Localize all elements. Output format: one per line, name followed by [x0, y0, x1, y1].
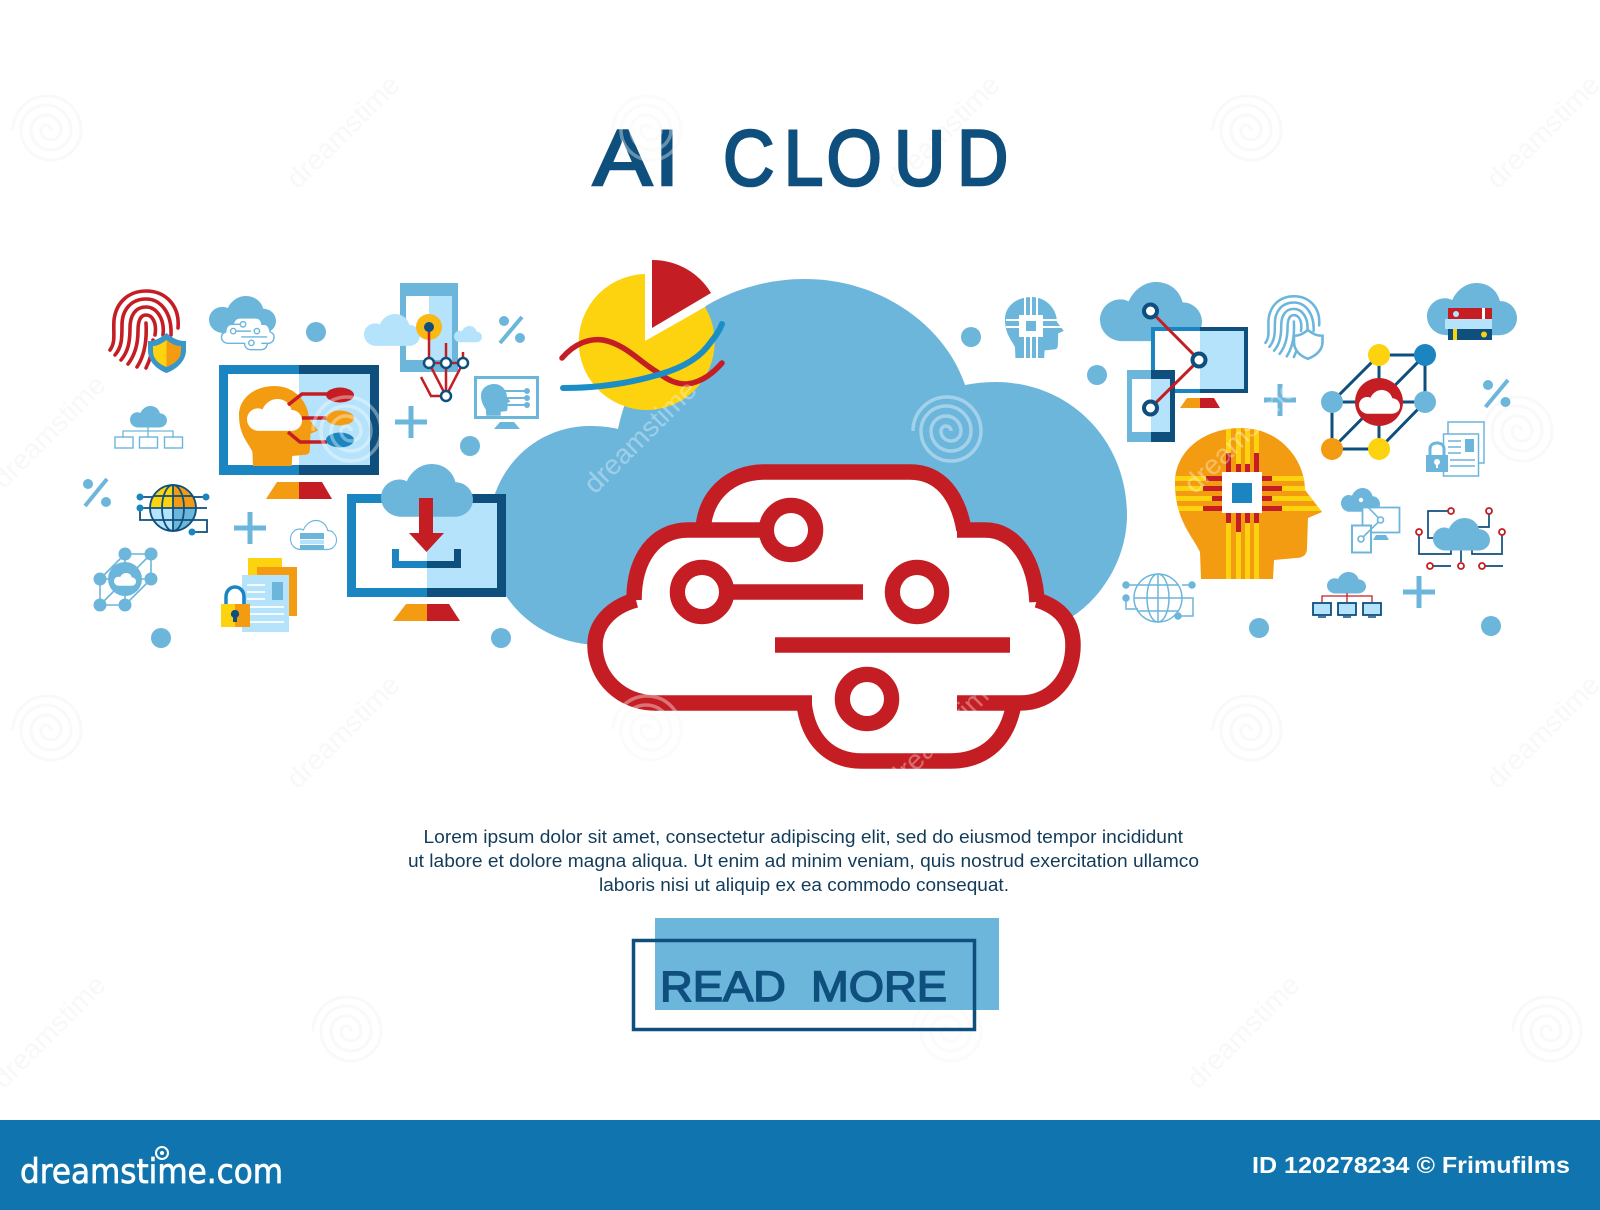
icon: cloud network with red links: [1313, 572, 1381, 617]
icon: outlined cloud with books: [290, 520, 336, 550]
description text block: laboris nisi ut aliquip ex ea commodo consequat.: [599, 874, 1009, 895]
chart: pie with curves: [562, 260, 722, 410]
icon: phone with clouds and network: [364, 283, 482, 401]
text: dreamstime: [577, 374, 703, 499]
icon: colored globe: [136, 485, 210, 536]
icon: outlined globe: [1123, 574, 1195, 622]
icon: cloud circuit: [1416, 508, 1505, 569]
description text block: [408, 826, 1199, 895]
icon: percent right: [1483, 380, 1510, 407]
icon: monitor with cloud download: [347, 464, 506, 621]
footer credit: ID 120278234 © Frimufilms: [1252, 1152, 1570, 1178]
description text block: ut labore et dolore magna aliqua. Ut enim ad minim veniam, quis nostrud exercitation ullamco: [408, 850, 1199, 871]
icon: small network cube: [94, 548, 158, 612]
footer logo: dreamstime.com: [20, 1152, 283, 1192]
icon: orange head with processor chip: [1170, 428, 1330, 579]
text: dreamstime: [880, 69, 1006, 194]
icon: cloud with books: [1427, 283, 1517, 340]
icon: network cloud with monitors: [115, 406, 182, 448]
big background cloud: [488, 279, 1127, 645]
text: dreamstime: [1177, 374, 1303, 499]
icon: outlined lock with documents: [1426, 422, 1484, 476]
icon: small monitor with head: [476, 378, 538, 429]
icon: monitor with head and cloud: [219, 365, 379, 499]
icon: red brain cloud circuit: [595, 472, 1073, 761]
decorative dots group: [151, 322, 1501, 648]
icon: percent left: [83, 479, 111, 507]
read more button: [634, 918, 999, 1030]
icon: cloud with devices network: [1100, 282, 1248, 442]
plus signs group: [234, 384, 1435, 608]
description text block: Lorem ipsum dolor sit amet, consectetur adipiscing elit, sed do eiusmod tempor incididunt: [424, 826, 1183, 847]
footer bar: [0, 1120, 1600, 1210]
read more button: READ MORE: [660, 963, 947, 1011]
title: [593, 113, 1008, 202]
title: CLOUD: [723, 114, 1008, 202]
icon: large network cube: [1321, 344, 1436, 460]
text: dreamstime: [1180, 969, 1306, 1094]
icon: outlined fingerprint: [1265, 296, 1322, 359]
text: dreamstime: [280, 69, 406, 194]
icon: lock with documents: [221, 558, 297, 632]
icon: fingerprint with shield: [110, 291, 186, 373]
text: dreamstime: [880, 669, 1006, 794]
icon: small cloud devices: [1341, 488, 1400, 552]
icon: small chip head: [1005, 297, 1064, 358]
text: dreamstime: [280, 669, 406, 794]
icon: small brain cloud: [209, 296, 276, 350]
title: AI: [593, 113, 679, 202]
icon: percent top: [499, 316, 525, 343]
